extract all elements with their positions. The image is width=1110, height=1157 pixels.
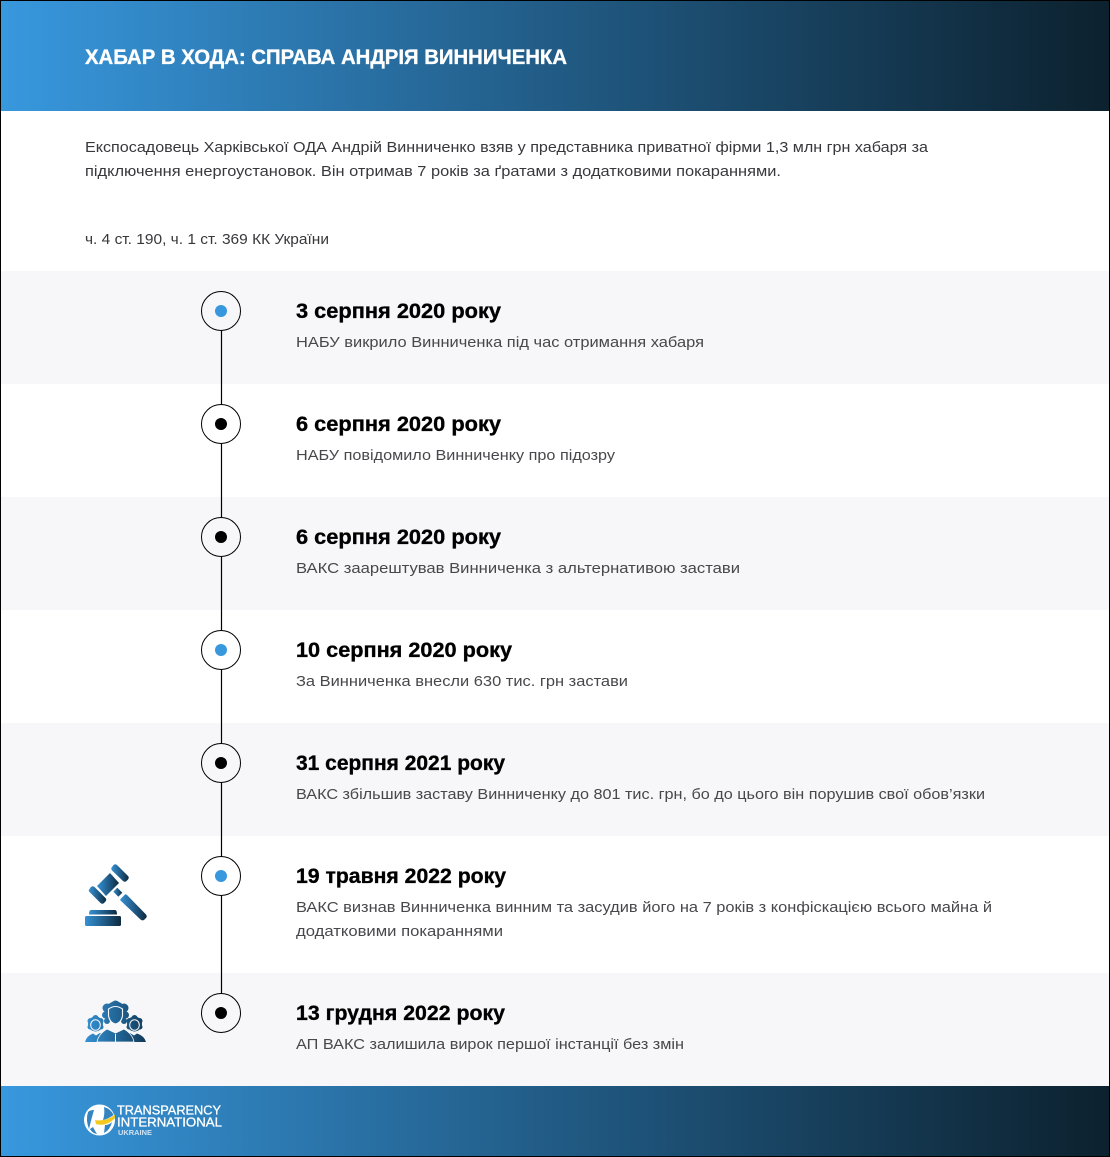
description 1: НАБУ викрило Винниченка під час отримання хабаря (296, 334, 704, 351)
marker 3 (202, 518, 240, 556)
date 4: 10 серпня 2020 року (296, 639, 512, 662)
center judge (97, 1000, 134, 1042)
left judge (85, 1015, 107, 1042)
intro text: підключення енергоустановок. Він отримав 7 років за ґратами з додатковими покараннями. (85, 163, 781, 180)
description 6 (296, 899, 992, 940)
logo: Transparency International Ukraine: UKRAINE (118, 1130, 152, 1137)
date 6: 19 травня 2022 року (296, 865, 506, 888)
intro text: Експосадовець Харківської ОДА Андрій Винниченко взяв у представника приватної фірми 1,3 млн грн хабаря за (85, 139, 929, 156)
description 6: ВАКС визнав Винниченка винним та засудив його на 7 років з конфіскацією всього майна й (296, 899, 992, 916)
header banner (0, 0, 1110, 111)
date 5: 31 серпня 2021 року (296, 752, 505, 775)
legal reference: ч. 4 ст. 190, ч. 1 ст. 369 КК України (85, 231, 329, 248)
logo mark (84, 1104, 115, 1136)
icon: gavel (85, 864, 147, 926)
row backgrounds (0, 271, 1110, 1086)
footer banner (0, 1086, 1110, 1157)
marker 4 (202, 630, 240, 670)
description 7: АП ВАКС залишила вирок першої інстанції без змін (296, 1036, 684, 1053)
right judge (123, 1015, 146, 1042)
title: ХАБАР В ХОДА: СПРАВА АНДРІЯ ВИННИЧЕНКА (85, 46, 567, 69)
description 5: ВАКС збільшив заставу Винниченку до 801 тис. грн, бо до цього він порушив свої обов’язки (296, 786, 985, 803)
marker 7 (202, 994, 240, 1032)
logo: Transparency International Ukraine (84, 1102, 222, 1137)
event 5 (202, 744, 985, 803)
description 6: додатковими покараннями (296, 923, 503, 940)
intro text (85, 139, 929, 180)
marker 2 (202, 404, 240, 444)
date 1: 3 серпня 2020 року (296, 300, 501, 323)
event 4 (202, 630, 628, 690)
logo: Transparency International Ukraine: INTERNATIONAL (117, 1114, 222, 1130)
date 7: 13 грудня 2022 року (296, 1002, 505, 1025)
event 1 (202, 292, 704, 351)
timeline axis (220, 311, 222, 1013)
event 3 (202, 518, 740, 577)
event 2 (202, 404, 616, 464)
event 6 (202, 856, 992, 940)
marker 1 (202, 292, 240, 330)
description 4: За Винниченка внесли 630 тис. грн застави (296, 673, 628, 690)
date 3: 6 серпня 2020 року (296, 526, 501, 549)
date 2: 6 серпня 2020 року (296, 413, 501, 436)
marker 5 (202, 744, 240, 782)
marker 6 (202, 856, 240, 896)
icon: panel of judges (85, 1000, 146, 1042)
logo text: TRANSPARENCY (117, 1102, 221, 1118)
description 3: ВАКС заарештував Винниченка з альтернативою застави (296, 560, 740, 577)
event 7 (202, 994, 684, 1053)
description 2: НАБУ повідомило Винниченку про підозру (296, 447, 616, 464)
